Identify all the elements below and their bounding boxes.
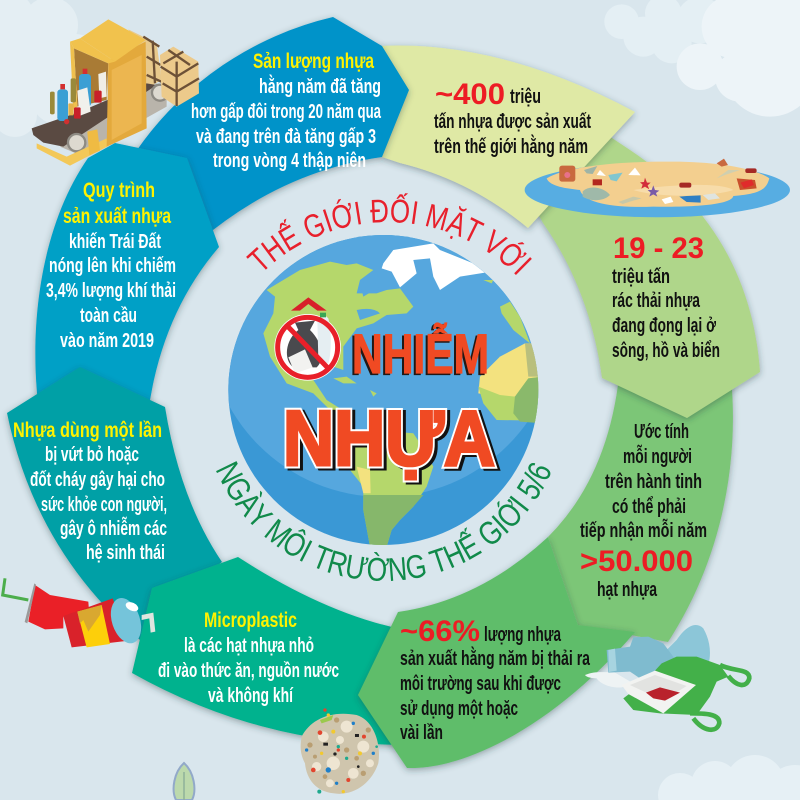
- text: single use: [13, 419, 167, 564]
- panel: blue teal, production process: [35, 143, 219, 420]
- title: curved bottom line: NGÀY MÔI TRƯỜNG THẾ GIỚI 5/6: [216, 461, 550, 581]
- text: 19-23 million tons: [612, 232, 720, 362]
- text: single use: bị vứt bỏ hoặc: [45, 444, 139, 466]
- text: plastic output: hơn gấp đôi trong 20 năm qua: [191, 101, 382, 123]
- text: microplastic: Microplastic: [204, 609, 297, 632]
- text: estimated particles: hạt nhựa: [597, 579, 658, 601]
- text: 66 percent: lượng nhựa: [484, 624, 562, 646]
- text: 400 million tons: tấn nhựa được sản xuất: [434, 111, 591, 133]
- text: 66 percent: [400, 615, 591, 744]
- icon: factory conveyor: [32, 19, 199, 166]
- text: plastic output: trong vòng 4 thập niên: [213, 150, 366, 172]
- cloud: bottom right: [658, 755, 800, 800]
- text: 400 million tons: trên thế giới hằng năm: [434, 134, 588, 158]
- text: microplastic: là các hạt nhựa nhỏ: [184, 635, 314, 657]
- text: 400 million tons: [434, 78, 591, 158]
- text: estimated particles: >50.000: [580, 545, 693, 578]
- text: production process: nóng lên khi chiếm: [49, 255, 176, 277]
- text: plastic output: và đang trên đà tăng gấp 3: [196, 126, 376, 148]
- title: NHỰA: NHỰA: [286, 396, 498, 484]
- title: NHỰA: NHỰA: [283, 394, 495, 482]
- icon: globe: [228, 235, 538, 545]
- text: 19-23 million tons: triệu tấn: [612, 266, 670, 288]
- text: 66 percent: môi trường sau khi được: [400, 673, 561, 695]
- panel: mid green: [530, 130, 760, 418]
- text: estimated particles: Ước tính: [634, 421, 689, 443]
- text: single use: gây ô nhiễm các: [60, 516, 167, 540]
- panel: green, 66 percent: [358, 537, 635, 768]
- text: estimated particles: mỗi người: [623, 444, 692, 468]
- text: 66 percent: ~66%: [400, 615, 480, 648]
- panel: light green: [380, 46, 635, 228]
- panel: teal, microplastic: [132, 557, 410, 745]
- text: microplastic: [158, 609, 339, 707]
- text: estimated particles: [580, 421, 707, 601]
- cloud: top right: [604, 0, 800, 117]
- cloud: top left: [0, 0, 101, 137]
- text: plastic output: [191, 50, 382, 172]
- text: single use: sức khỏe con người,: [41, 494, 167, 516]
- text: microplastic: và không khí: [208, 685, 294, 707]
- icon: no plastic bag sign: [274, 297, 341, 381]
- panel: blue, plastic output: [137, 17, 409, 230]
- text: production process: toàn cầu: [80, 305, 137, 327]
- icon: polluted island: [525, 159, 790, 217]
- icon: bottles and bag: [585, 625, 749, 730]
- title: NHIỄM: NHIỄM: [352, 322, 489, 385]
- text: estimated particles: trên hành tinh: [605, 471, 702, 493]
- text: 400 million tons: ~400: [435, 78, 505, 111]
- text: estimated particles: tiếp nhận mỗi năm: [580, 518, 707, 542]
- text: 19-23 million tons: rác thải nhựa: [612, 290, 701, 312]
- title: curved top line: THẾ GIỚI ĐỐI MẶT VỚI: [246, 193, 532, 275]
- text: production process: sản xuất nhựa: [63, 205, 171, 228]
- text: plastic output: hằng năm đã tăng: [259, 74, 381, 98]
- panel: dark teal, single use: [7, 367, 222, 640]
- text: 19-23 million tons: đang đọng lại ở: [612, 315, 717, 337]
- text: estimated particles: có thể phải: [612, 496, 686, 518]
- text: 66 percent: sử dụng một hoặc: [400, 698, 518, 720]
- text: 66 percent: sản xuất hằng năm bị thải ra: [400, 646, 591, 670]
- text: 19-23 million tons: sông, hồ và biển: [612, 340, 720, 362]
- text: single use: Nhựa dùng một lần: [13, 419, 162, 442]
- text: single use: hệ sinh thái: [86, 542, 165, 564]
- text: production process: 3,4% lượng khí thải: [46, 280, 176, 302]
- text: production process: vào năm 2019: [60, 330, 154, 352]
- text: microplastic: đi vào thức ăn, nguồn nước: [158, 660, 339, 682]
- text: 19-23 million tons: 19 - 23: [613, 232, 704, 265]
- title: NHIỄM: NHIỄM: [350, 324, 487, 386]
- panel: mid green 4: [548, 370, 733, 642]
- icon: plastic microbeads: [301, 708, 379, 794]
- text: 66 percent: vài lần: [400, 722, 443, 744]
- text: plastic output: Sản lượng nhựa: [253, 50, 374, 73]
- icon: cup and tube: [3, 578, 155, 647]
- text: production process: Quy trình: [83, 179, 155, 202]
- text: 400 million tons: triệu: [510, 86, 541, 108]
- title: NHỰA: NHỰA: [283, 394, 495, 482]
- text: single use: đốt cháy gây hại cho: [30, 469, 165, 491]
- text: production process: khiến Trái Đất: [69, 231, 161, 253]
- text: production process: [46, 179, 176, 352]
- icon: leaf: [174, 763, 194, 800]
